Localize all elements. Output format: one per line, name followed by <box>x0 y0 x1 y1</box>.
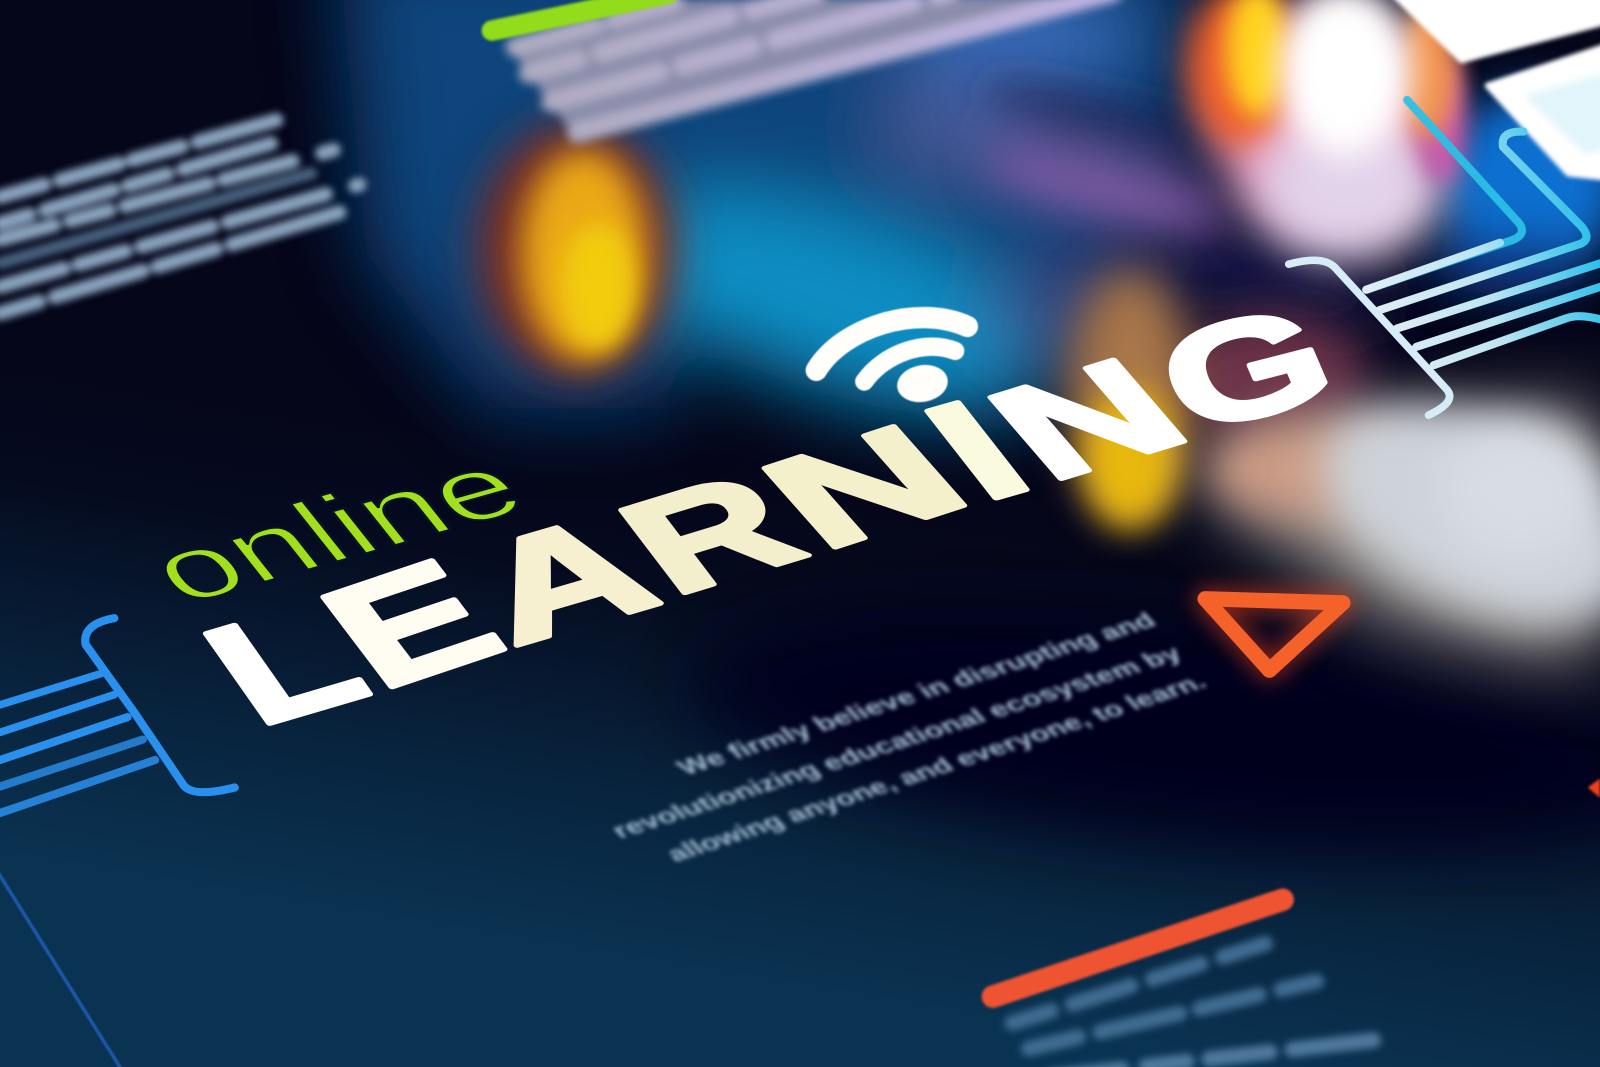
letter N second: N <box>956 331 1220 508</box>
white panels top right <box>1394 0 1600 177</box>
letter N: N <box>729 397 1000 577</box>
letter A: A <box>446 482 681 675</box>
text block: blurred paragraph top centre <box>510 0 1116 141</box>
diagonal blue line lower left <box>0 869 122 1067</box>
letter E: E <box>289 529 532 719</box>
wifi icon <box>816 318 967 406</box>
lens flare: bright multicolour top right <box>1186 0 1465 260</box>
text block: blurred paragraph bottom <box>1012 944 1388 1067</box>
heading: online: online <box>126 435 545 622</box>
lens flare: pale light lower right <box>1204 361 1600 669</box>
paragraph text <box>606 609 1213 867</box>
green accent bar <box>492 0 668 31</box>
background: dark band across the middle right <box>675 567 1600 892</box>
paragraph line 2: revolutionizing educational ecosystem by <box>606 642 1189 843</box>
lens flare: warm light behind the G <box>1067 268 1367 528</box>
text block: blurred paragraph top left <box>0 113 359 313</box>
letter I: I <box>893 371 1060 529</box>
letter L: L <box>174 574 395 755</box>
background: blurred blue and purple glow <box>337 0 1413 459</box>
red marker right edge <box>1588 778 1600 798</box>
heading: LEARNING <box>174 276 1355 755</box>
letter R: R <box>589 445 832 622</box>
background: purple band <box>974 70 1600 296</box>
orange accent bar <box>993 900 1283 997</box>
play triangle icon <box>1205 599 1343 670</box>
circuit connector right <box>1289 100 1600 415</box>
paragraph line 3: allowing anyone, and everyone, to learn. <box>661 671 1213 867</box>
lens flare: yellow bokeh left <box>477 122 677 377</box>
paragraph line 1: We firmly believe in disrupting and <box>672 609 1162 780</box>
circuit connector left <box>0 618 235 813</box>
letter G: G <box>1137 276 1355 462</box>
